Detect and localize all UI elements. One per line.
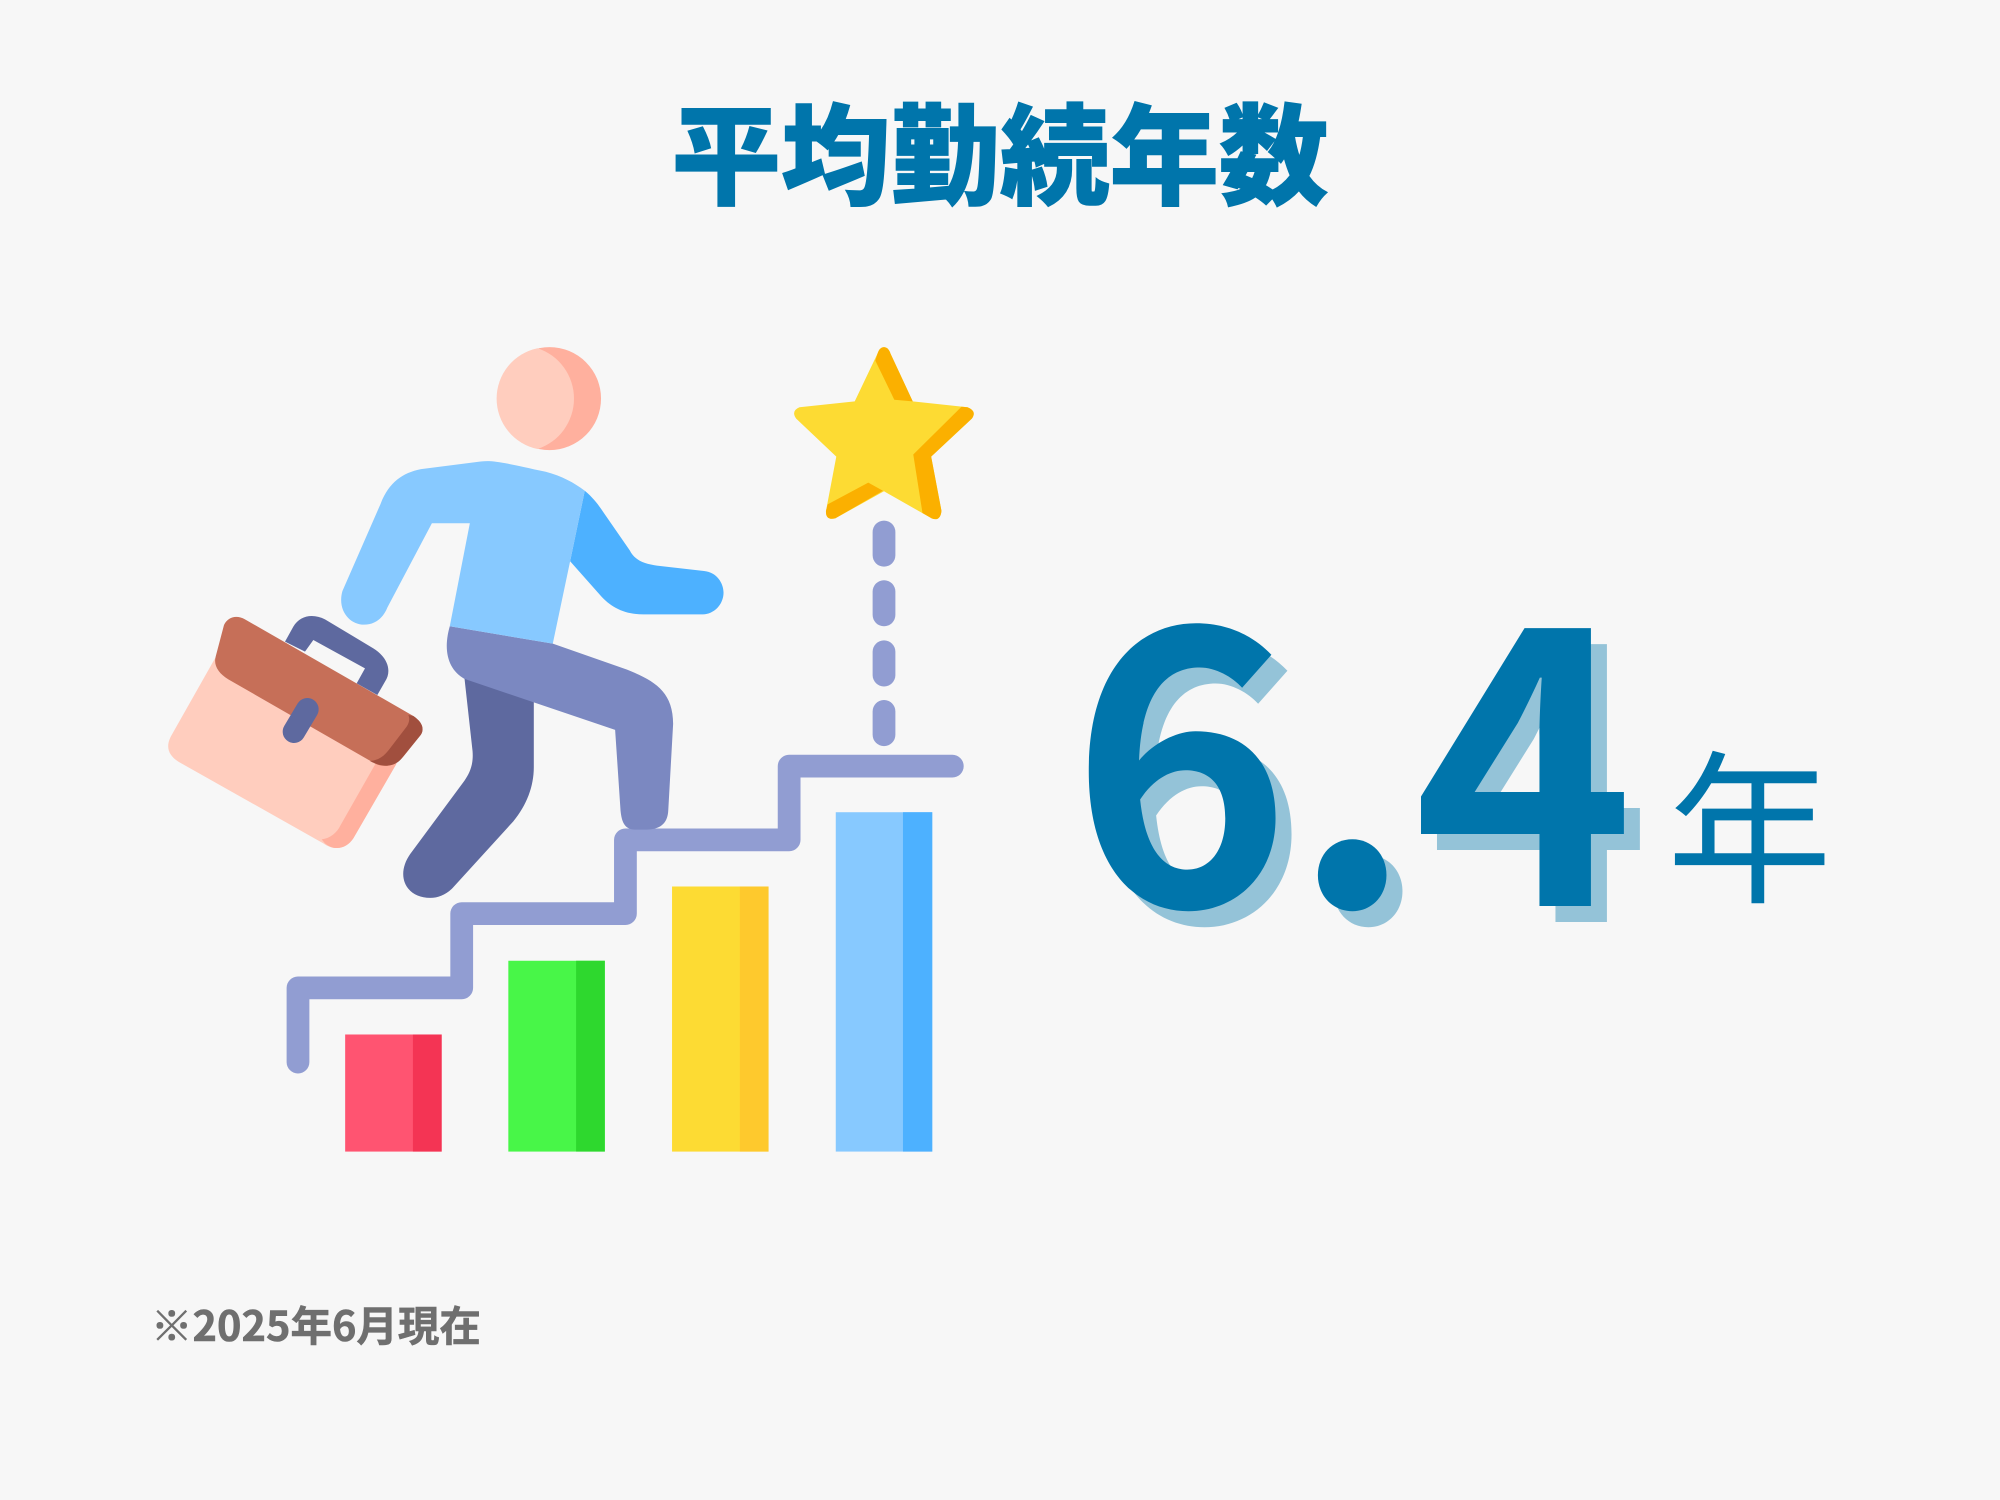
head — [497, 347, 601, 450]
back leg — [403, 678, 534, 898]
figure: person — [341, 347, 724, 898]
dashed line to star — [863, 532, 905, 735]
briefcase flap — [215, 617, 423, 766]
far arm — [570, 491, 724, 614]
bar chart — [345, 812, 932, 1152]
stair line — [298, 766, 952, 1062]
briefcase body — [168, 658, 397, 848]
briefcase clasp — [294, 709, 307, 732]
big number: 6.4: 6.4 — [1070, 472, 1634, 1015]
icon: briefcase — [168, 616, 423, 848]
briefcase handle — [285, 616, 388, 695]
icon: star — [794, 347, 974, 519]
front leg — [447, 626, 673, 830]
illustration: worker climbing bar chart stairs — [298, 347, 974, 1152]
big number shadow: 6.4 — [1086, 488, 1650, 1031]
torso and near arm — [341, 461, 585, 644]
footnote: ※2025年6月現在 — [151, 1293, 481, 1353]
title: 平均勤続年数 — [672, 69, 1328, 228]
unit: 年: 年 — [1667, 699, 1832, 938]
